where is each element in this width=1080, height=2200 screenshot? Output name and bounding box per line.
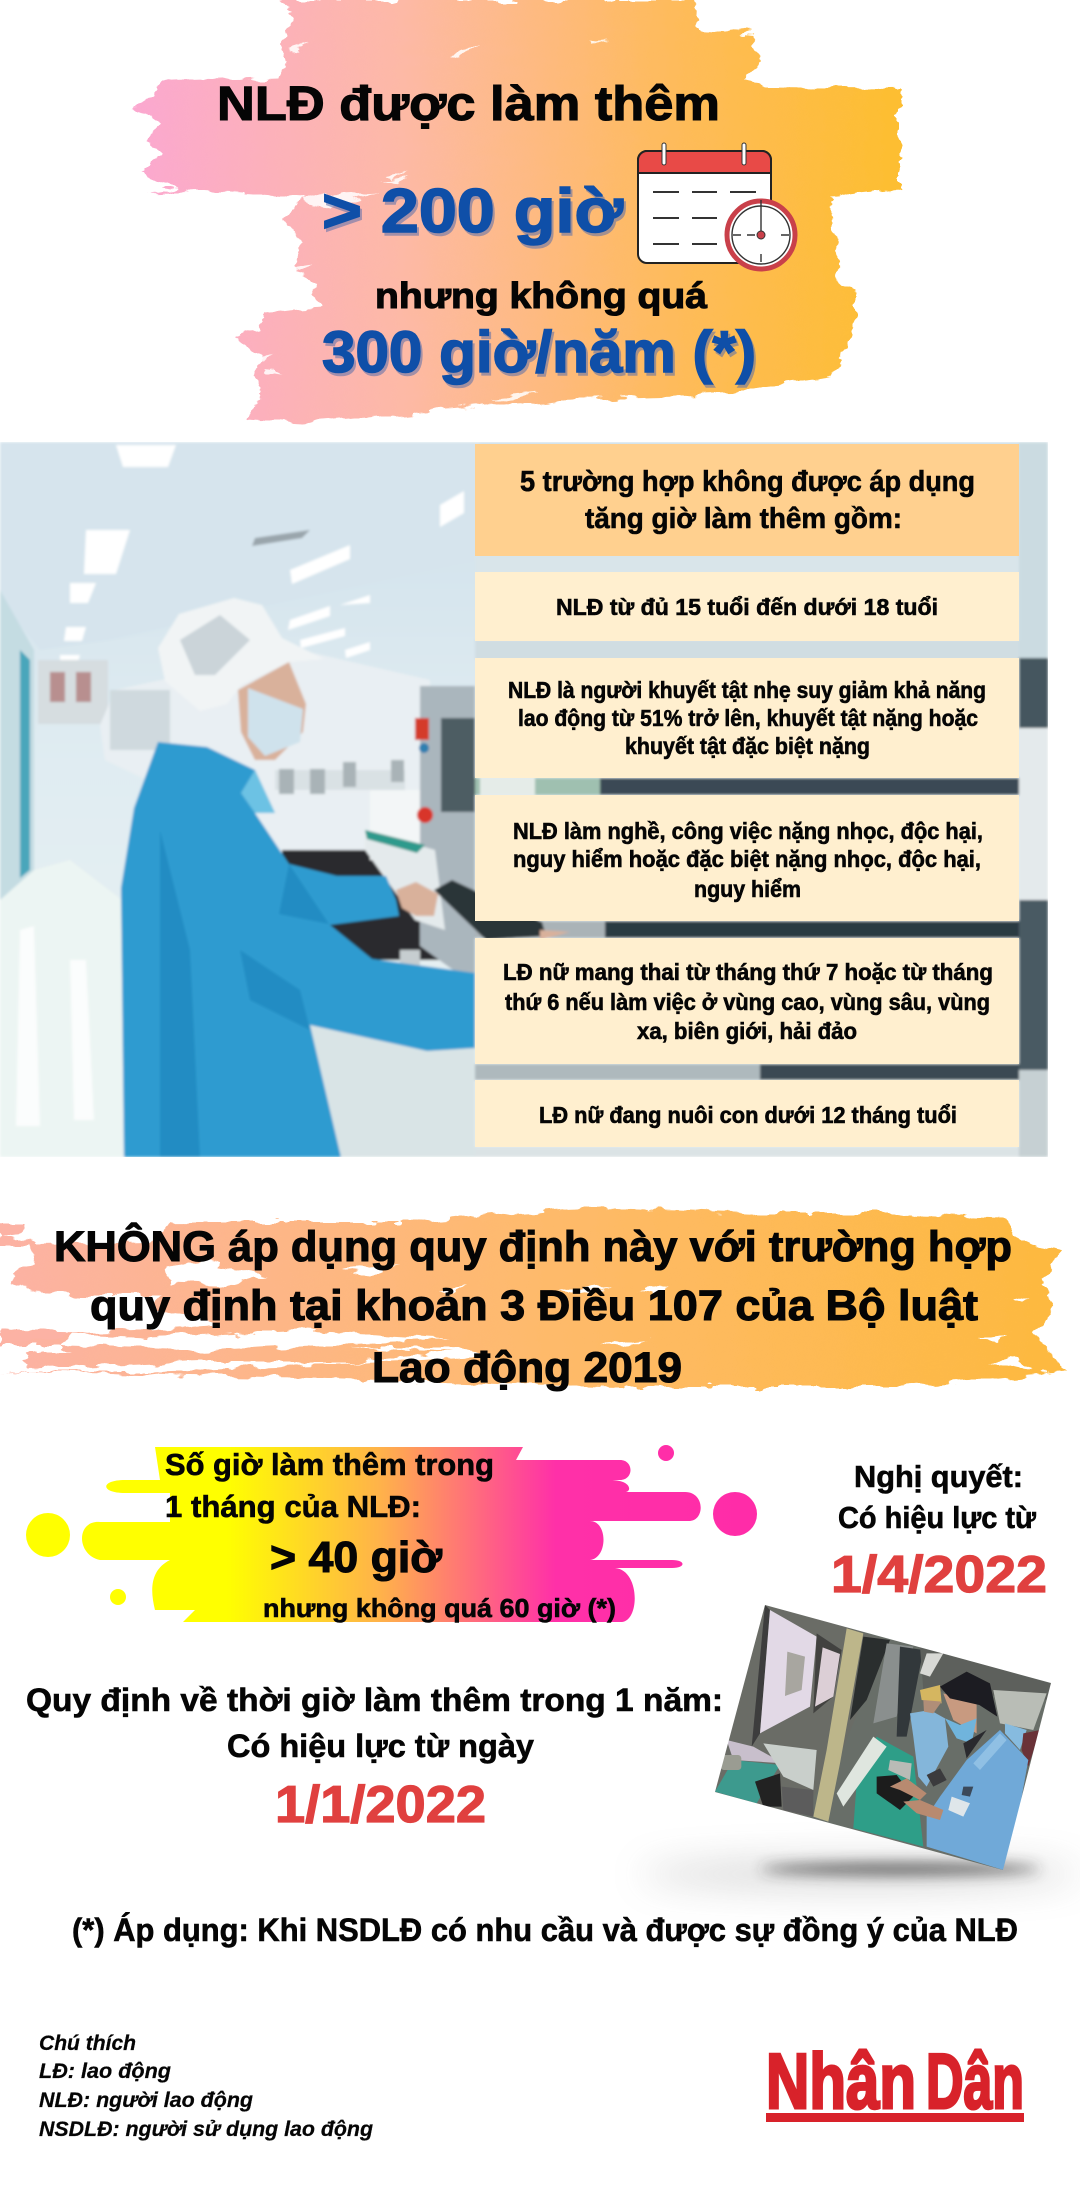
case 2	[475, 658, 1019, 778]
yearly overtime text: Quy định về thời giờ làm thêm trong 1 năm:	[26, 1682, 723, 1718]
case 4: thứ 6 nếu làm việc ở vùng cao, vùng sâu, vùng	[505, 989, 990, 1015]
legend: NLĐ: người lao động	[39, 2089, 253, 2112]
monthly overtime text	[165, 1447, 616, 1623]
exception statement: KHÔNG áp dụng quy định này với trường hợp	[54, 1222, 1012, 1271]
monthly overtime text: nhưng không quá 60 giờ (*)	[263, 1593, 616, 1623]
legend	[39, 2032, 373, 2141]
monthly overtime text: Số giờ làm thêm trong	[165, 1447, 494, 1482]
exception statement: Lao động 2019	[372, 1344, 682, 1392]
legend: Chú thích	[39, 2032, 136, 2055]
exception statement	[54, 1222, 1012, 1392]
logo: Nhân Dân: Nhân	[766, 2037, 916, 2125]
case 5	[475, 1080, 1019, 1147]
photo: clean-room worker	[0, 442, 1048, 1157]
panel heading	[475, 444, 1019, 556]
case 3: NLĐ làm nghề, công việc nặng nhọc, độc hại,	[513, 818, 983, 844]
case 2: khuyết tật đặc biệt nặng	[625, 733, 870, 759]
case 3: nguy hiểm hoặc đặc biệt nặng nhọc, độc hại,	[513, 846, 981, 872]
title line 1: NLĐ được làm thêm	[217, 78, 720, 131]
photo shadow	[640, 1860, 1080, 1888]
exception statement: quy định tại khoản 3 Điều 107 của Bộ luật	[90, 1282, 978, 1330]
case 4: LĐ nữ mang thai từ tháng thứ 7 hoặc từ tháng	[503, 959, 993, 985]
gradient blob background	[26, 1445, 757, 1622]
legend: NSDLĐ: người sử dụng lao động	[39, 2118, 373, 2141]
monthly overtime text: > 40 giờ	[270, 1533, 443, 1582]
yearly overtime text	[26, 1682, 723, 1834]
yearly overtime text: 1/1/2022	[275, 1776, 486, 1834]
case 2: NLĐ là người khuyết tật nhẹ suy giảm khả năng	[508, 677, 986, 703]
yearly overtime text: Có hiệu lực từ ngày	[227, 1728, 534, 1764]
icon: calendar with clock	[638, 143, 795, 269]
case 3	[475, 795, 1019, 921]
case 3: nguy hiểm	[694, 876, 801, 902]
case 4	[475, 938, 1019, 1064]
case 2: lao động từ 51% trở lên, khuyết tật nặng hoặc	[518, 705, 978, 731]
title line 4: 300 giờ/năm (*): 300 giờ/năm (*)	[322, 320, 756, 385]
case 1	[475, 572, 1019, 641]
panel heading: tăng giờ làm thêm gồm:	[585, 503, 902, 535]
middle brush background	[0, 1200, 1067, 1387]
title line 2: > 200 giờ: > 200 giờ	[322, 177, 624, 246]
resolution effective date: Có hiệu lực từ	[838, 1500, 1037, 1535]
photo: factory workers	[715, 1605, 1051, 1870]
resolution effective date: 1/4/2022	[831, 1546, 1047, 1604]
logo: Nhân Dân: Dân	[926, 2037, 1024, 2125]
top brush background	[133, 0, 900, 422]
resolution effective date: Nghị quyết:	[854, 1459, 1023, 1494]
panel: five exclusion cases	[475, 444, 1019, 1147]
case 1: NLĐ từ đủ 15 tuổi đến dưới 18 tuổi	[556, 594, 938, 620]
resolution effective date	[831, 1459, 1047, 1604]
coat shape of worker	[121, 742, 475, 1157]
monthly overtime text: 1 tháng của NLĐ:	[165, 1489, 421, 1524]
case 5: LĐ nữ đang nuôi con dưới 12 tháng tuổi	[539, 1102, 957, 1128]
footnote: (*) Áp dụng: Khi NSDLĐ có nhu cầu và được sự đồng ý của NLĐ	[72, 1912, 1018, 1948]
panel heading: 5 trường hợp không được áp dụng	[520, 466, 975, 498]
case 4: xa, biên giới, hải đảo	[637, 1018, 857, 1044]
title line 3: nhưng không quá: nhưng không quá	[375, 275, 708, 316]
legend: LĐ: lao động	[39, 2060, 171, 2083]
